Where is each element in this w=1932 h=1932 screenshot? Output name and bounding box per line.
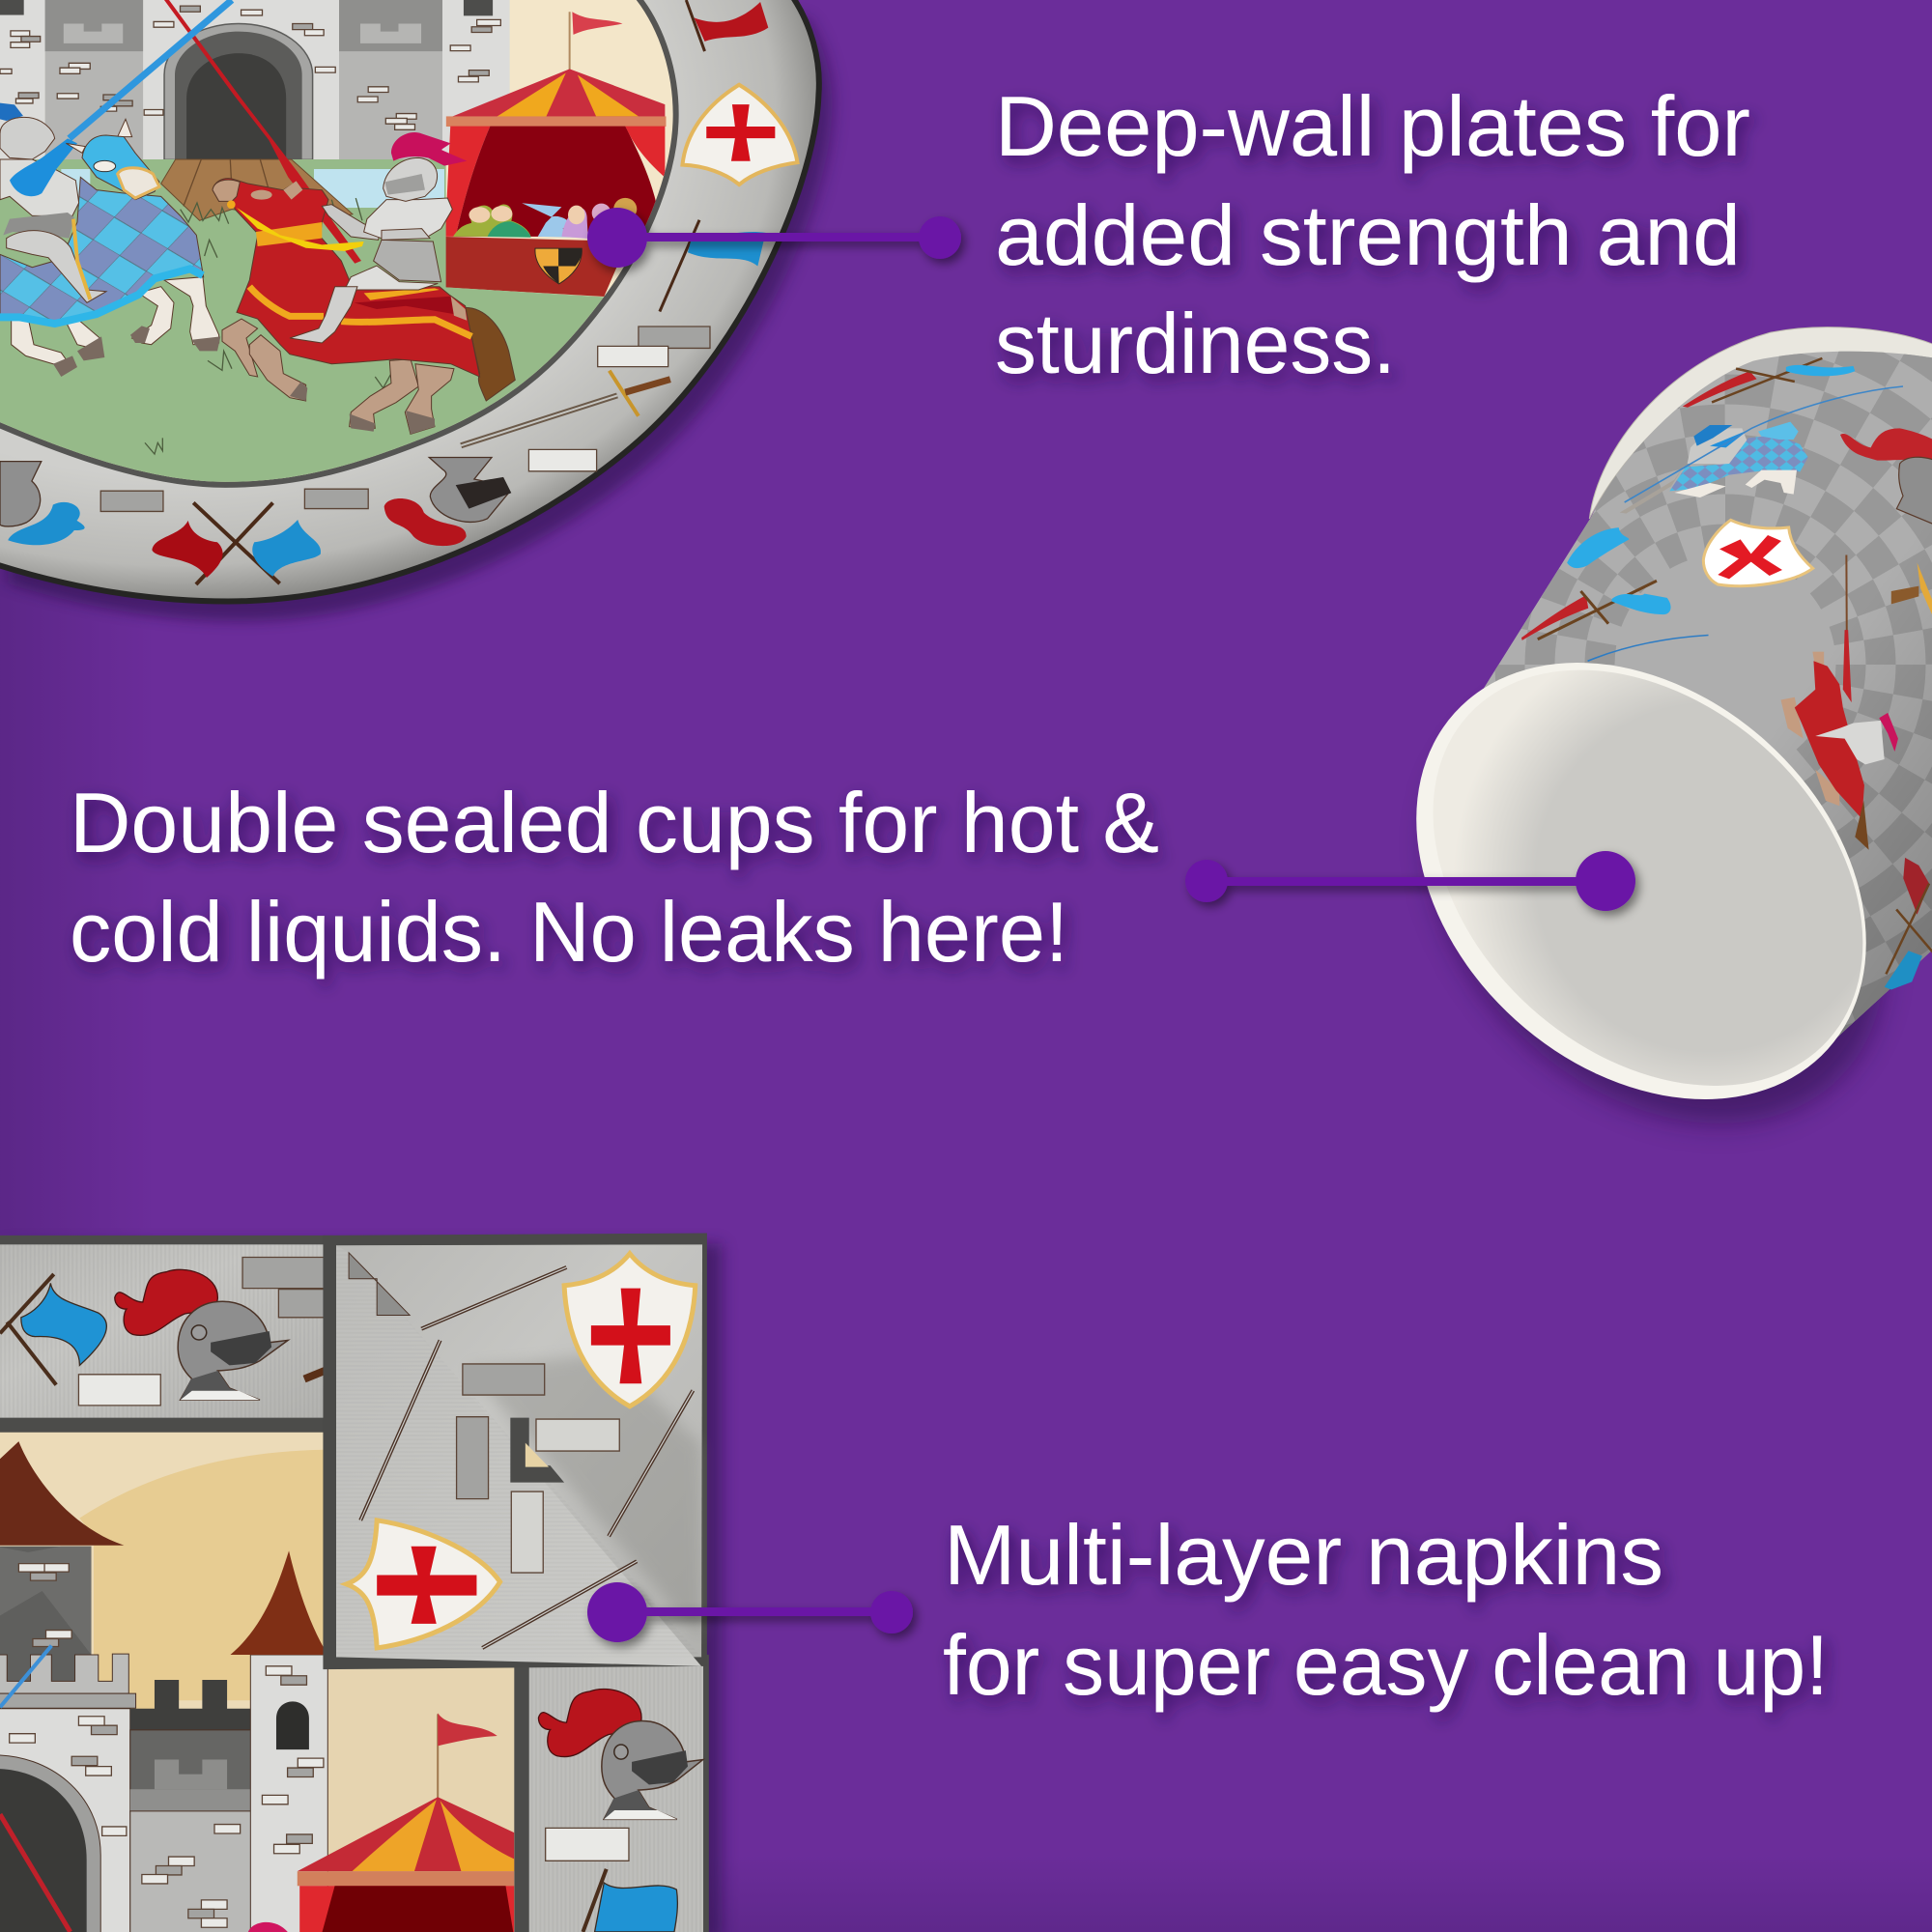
text: napkins: Multi-layer napkins: [944, 1507, 1663, 1603]
text: plates: sturdiness.: [995, 296, 1396, 391]
napkin castle illustration: [0, 1441, 514, 1932]
plate centre scene: [0, 0, 673, 482]
blue knight: [0, 0, 232, 377]
plate rim decorations: [0, 0, 797, 584]
flap print: [347, 1254, 696, 1648]
cup print: [1521, 358, 1932, 989]
cup: [1416, 327, 1932, 1136]
text: cups: [70, 775, 1159, 980]
tent with spectators: [439, 12, 666, 297]
red lance: [164, 0, 361, 264]
cup base: [1329, 574, 1932, 1188]
connector: cup: [1185, 851, 1635, 911]
text: napkins: [943, 1507, 1829, 1713]
text: cups: Double sealed cups for hot &: [70, 775, 1159, 870]
napkin folded flap: [323, 1234, 707, 1669]
text: plates: [995, 78, 1750, 391]
text: plates: Deep-wall plates for: [995, 78, 1750, 174]
lower napkin layer: [0, 1236, 709, 1932]
castle: [0, 0, 510, 161]
napkin: [0, 1234, 722, 1932]
plate: jousting scene: [0, 0, 840, 627]
text: cups: cold liquids. No leaks here!: [70, 884, 1068, 980]
red knight: [213, 132, 515, 434]
cup rim: [1589, 327, 1932, 519]
cup body with checker fan: [1484, 352, 1932, 1038]
text: napkins: for super easy clean up!: [943, 1617, 1829, 1713]
cup print: blue knight, shield, helmet: [1620, 386, 1932, 586]
joust figures: [0, 0, 604, 482]
ground, moat and drawbridge: [0, 158, 604, 482]
connector: plate: [587, 208, 961, 268]
connector: napkin: [587, 1582, 913, 1642]
napkin border print: [0, 1258, 703, 1932]
text: plates: added strength and: [995, 187, 1741, 283]
